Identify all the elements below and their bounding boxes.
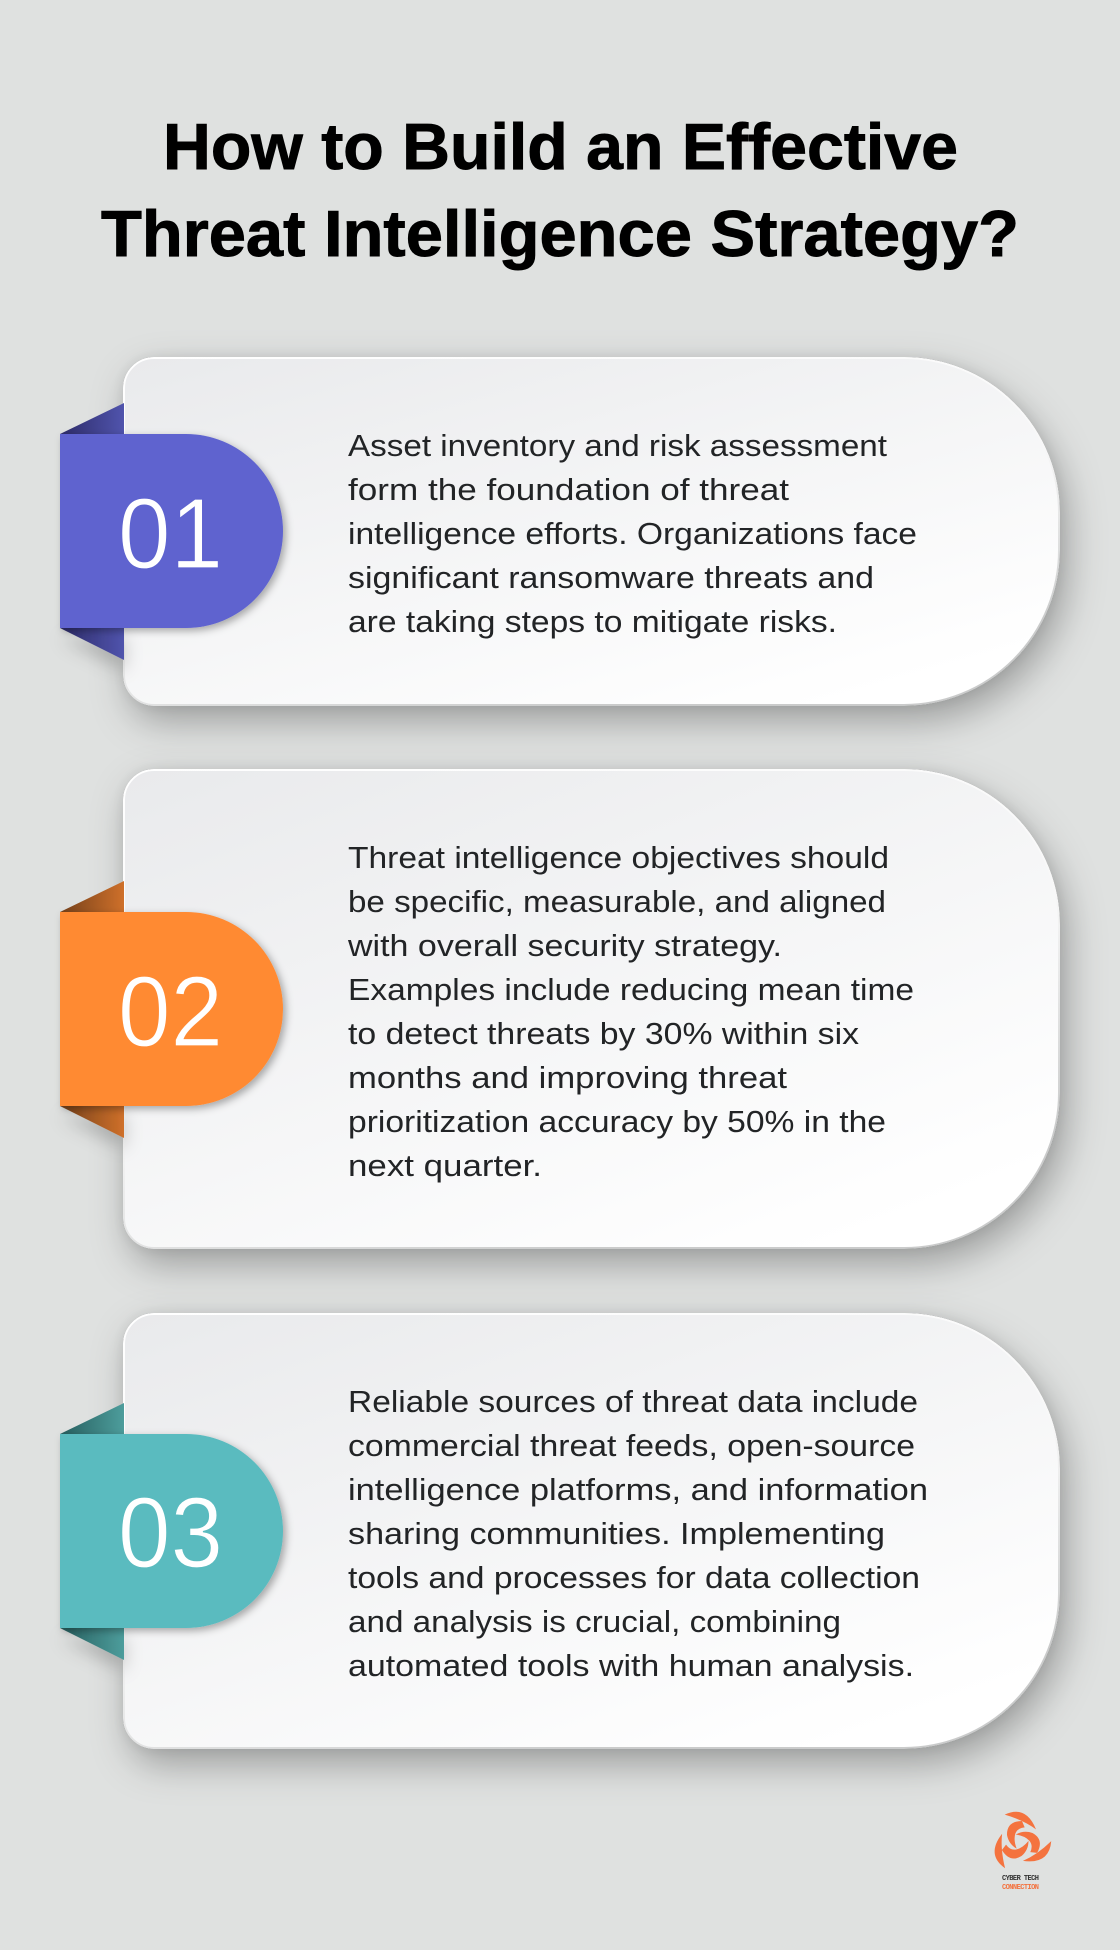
text block 02: to detect threats by 30% within six xyxy=(348,1016,860,1051)
badge 03 ribbon folds xyxy=(60,1403,124,1660)
text block 02: with overall security strategy. xyxy=(347,928,782,963)
text block 03: commercial threat feeds, open-source xyxy=(348,1428,915,1463)
panel: step 03 xyxy=(60,1314,1059,1748)
card 01 background xyxy=(124,358,1059,705)
number 01: 01 xyxy=(118,478,223,590)
text block 03: automated tools with human analysis. xyxy=(348,1648,914,1683)
text block 02: prioritization accuracy by 50% in the xyxy=(348,1104,886,1139)
text block 03: sharing communities. Implementing xyxy=(348,1516,885,1551)
badge 02 xyxy=(60,912,283,1106)
logo: Cyber Tech Connection xyxy=(987,1812,1054,1892)
text block 01: form the foundation of threat xyxy=(348,472,789,507)
text block 02: months and improving threat xyxy=(348,1060,787,1095)
title: Threat Intelligence Strategy? xyxy=(101,197,1019,270)
logo wordmark: CONNECTION xyxy=(1002,1884,1039,1892)
text block 01: intelligence efforts. Organizations face xyxy=(348,516,917,551)
icon: swirl emblem xyxy=(987,1812,1054,1870)
text block 03: intelligence platforms, and information xyxy=(348,1472,928,1507)
logo wordmark: CYBER TECH xyxy=(1002,1875,1039,1883)
logo wordmark xyxy=(1002,1875,1039,1892)
card 03 background xyxy=(124,1314,1059,1748)
text block 03: tools and processes for data collection xyxy=(348,1560,920,1595)
text block 01: are taking steps to mitigate risks. xyxy=(348,604,837,639)
badge 03 xyxy=(60,1434,283,1628)
title xyxy=(101,110,1019,270)
panel: step 01 xyxy=(60,358,1059,705)
text block 01: significant ransomware threats and xyxy=(348,560,874,595)
text block 02: Examples include reducing mean time xyxy=(348,972,914,1007)
text block 01: Asset inventory and risk assessment xyxy=(348,428,887,463)
text block 02: be specific, measurable, and aligned xyxy=(348,884,886,919)
badge 02 ribbon folds xyxy=(60,881,124,1138)
number 02: 02 xyxy=(118,956,223,1068)
badge 01 ribbon folds xyxy=(60,403,124,660)
number 03: 03 xyxy=(118,1477,223,1589)
text block 03: Reliable sources of threat data include xyxy=(348,1384,918,1419)
text block 02: Threat intelligence objectives should xyxy=(348,840,889,875)
text block 03: and analysis is crucial, combining xyxy=(348,1604,841,1639)
card 02 background xyxy=(124,770,1059,1248)
text block 02: next quarter. xyxy=(348,1148,542,1183)
panel: step 02 xyxy=(60,770,1059,1248)
title: How to Build an Effective xyxy=(163,110,958,183)
badge 01 xyxy=(60,434,283,628)
